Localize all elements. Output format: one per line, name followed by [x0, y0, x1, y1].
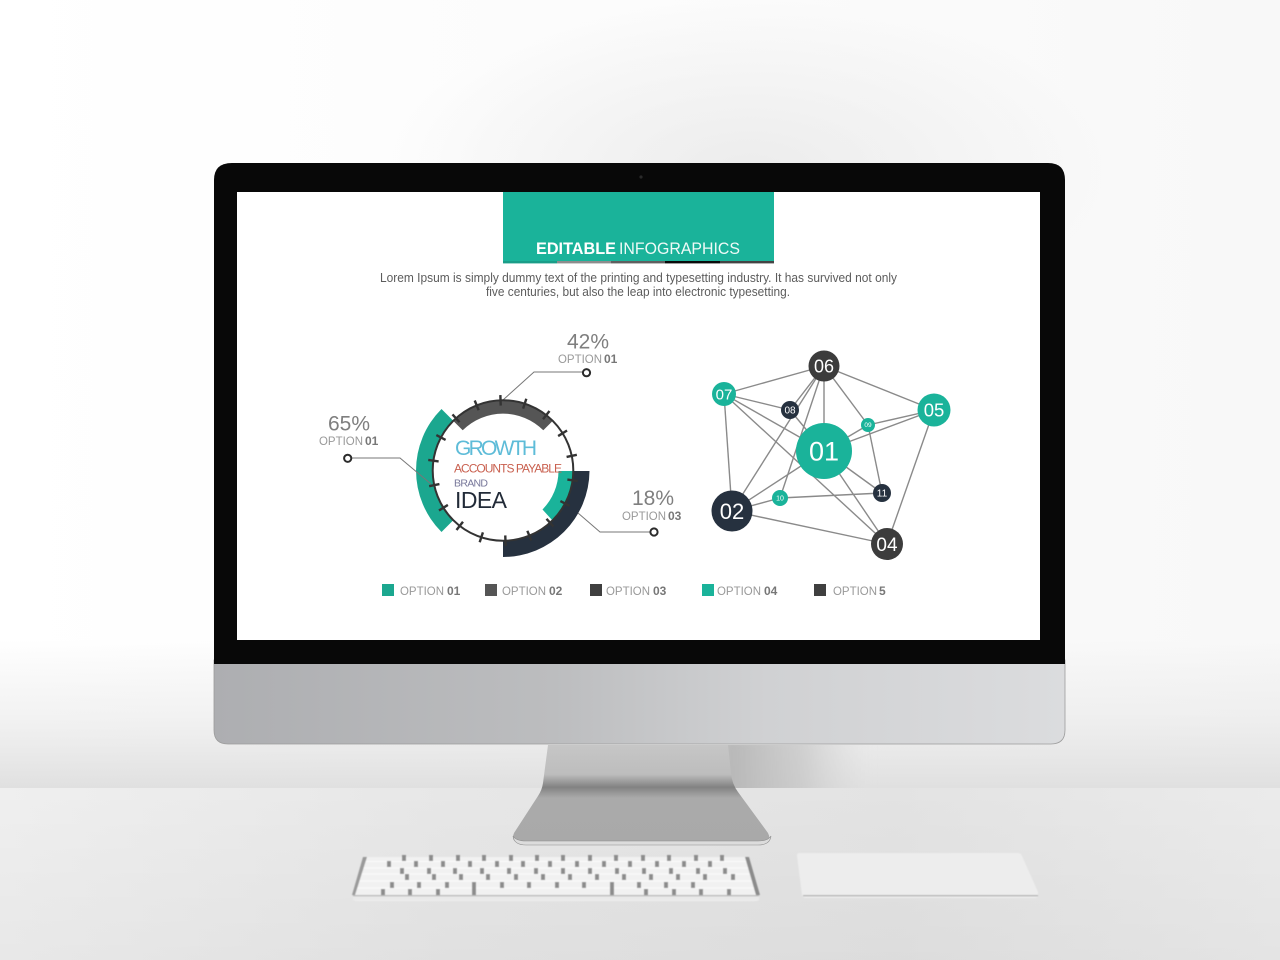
node 11: 11	[877, 488, 888, 500]
legend item: option 01: 01	[447, 584, 461, 598]
callout: 65% option 01	[319, 412, 379, 448]
node 07: 07	[716, 386, 732, 404]
callout: 65% option 01: OPTION	[319, 434, 363, 448]
node 04: 04	[876, 535, 898, 556]
legend item: option 03	[590, 584, 667, 598]
callout: 18% option 03	[622, 487, 682, 523]
legend item: option 01: OPTION	[400, 584, 444, 598]
arc: navy bottom-right segment	[503, 471, 590, 557]
node 06	[808, 350, 840, 382]
legend item: option 03: OPTION	[606, 584, 650, 598]
camera	[639, 175, 643, 179]
callout: 18% option 03: 18%	[632, 487, 674, 510]
callout: 18% option 03: 03	[668, 509, 682, 523]
keyboard	[352, 855, 760, 901]
stand foot edge	[513, 836, 771, 845]
node 04	[871, 528, 903, 560]
legend item: option 02: OPTION	[502, 584, 546, 598]
monitor	[214, 163, 1065, 744]
legend item: option 02	[485, 584, 563, 598]
node 10: 10	[776, 496, 784, 502]
ring outline	[433, 400, 573, 541]
callout: 18% option 03: OPTION	[622, 509, 666, 523]
callout: 42% option 01: 42%	[567, 330, 609, 354]
legend item: option 5: OPTION	[833, 584, 877, 598]
callout: 65% option 01: 01	[365, 434, 379, 448]
legend	[382, 584, 886, 598]
node 05	[918, 394, 950, 426]
ring chart	[319, 330, 682, 557]
legend item: option 03: 03	[653, 584, 667, 598]
screen	[237, 192, 1040, 640]
heading: EDITABLE	[536, 239, 616, 258]
node 11	[873, 484, 891, 502]
intro text: Lorem Ipsum is simply dummy text of the printing and typesetting industry. It has survived not only	[380, 271, 898, 285]
ring ticks	[428, 395, 578, 546]
center text	[454, 437, 562, 513]
node 09: 09	[864, 422, 872, 429]
callout: 42% option 01: 01	[604, 352, 618, 366]
arc: teal inner right segment	[542, 471, 573, 520]
node 02	[712, 490, 752, 532]
leader line: 18%	[578, 513, 658, 536]
node 10	[772, 490, 788, 506]
legend item: option 04	[702, 584, 778, 598]
center text: IDEA	[455, 487, 508, 513]
key gaps	[381, 855, 735, 895]
node 06: 06	[814, 356, 834, 376]
leader line: 65%	[344, 455, 431, 484]
arc: gray top segment	[453, 400, 553, 430]
legend item: option 01	[382, 584, 461, 598]
monitor bezel	[214, 163, 1065, 664]
center text: ACCOUNTS PAYABLE	[454, 462, 562, 476]
legend item: option 5	[814, 584, 886, 598]
center text: BRAND	[454, 478, 488, 490]
legend item: option 02: 02	[549, 584, 563, 598]
node 08: 08	[784, 406, 796, 416]
center text: GROWTH	[455, 437, 537, 460]
node 09	[861, 418, 875, 432]
node 08	[781, 401, 799, 419]
legend item: option 5: 5	[879, 584, 886, 598]
node 07	[712, 382, 736, 406]
trackpad	[797, 853, 1038, 898]
node 02: 02	[720, 499, 744, 524]
monitor stand	[513, 745, 771, 845]
legend item: option 04: 04	[764, 584, 778, 598]
callout: 42% option 01: OPTION	[558, 352, 602, 366]
node 01: 01	[809, 436, 839, 466]
callout: 42% option 01	[558, 330, 618, 366]
heading: INFOGRAPHICS	[619, 239, 740, 258]
monitor chin	[214, 660, 1065, 744]
node 01	[796, 423, 852, 479]
callout: 65% option 01: 65%	[328, 412, 370, 436]
arc: teal left segment	[416, 409, 454, 532]
heading	[536, 239, 740, 258]
network links	[724, 366, 934, 544]
legend item: option 04: OPTION	[717, 584, 761, 598]
node 05: 05	[924, 400, 944, 420]
banner bottom strip	[503, 261, 774, 263]
intro text: five centuries, but also the leap into electronic typesetting.	[486, 285, 790, 299]
intro text	[380, 271, 898, 299]
header banner	[503, 192, 774, 263]
network diagram	[712, 350, 950, 560]
leader line: 42%	[503, 369, 590, 400]
